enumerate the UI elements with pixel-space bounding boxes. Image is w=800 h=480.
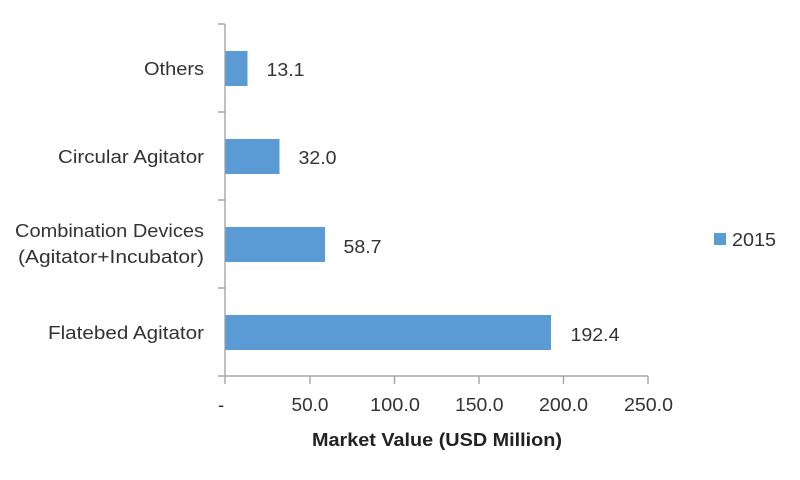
x axis tick labels: 150.0 — [455, 394, 504, 415]
legend: 2015 — [714, 229, 776, 250]
category labels: Flatebed Agitator — [48, 322, 204, 343]
bar: Combination Devices: 58.7 — [344, 236, 382, 257]
y axis with category ticks — [218, 24, 225, 376]
bar: Circular Agitator: 32.0 — [298, 147, 336, 168]
bar: Others: 13.1 — [266, 59, 304, 80]
bar: Combination Devices — [226, 227, 382, 262]
x axis tick labels: 50.0 — [292, 394, 328, 415]
x axis title: Market Value (USD Million) — [312, 430, 562, 450]
category labels: Others — [144, 58, 204, 79]
category labels: Circular Agitator — [58, 146, 204, 167]
bar: Flatebed Agitator — [226, 315, 620, 350]
x axis with value ticks — [218, 376, 648, 384]
bar: Others — [226, 51, 304, 86]
x axis tick labels: 100.0 — [370, 394, 420, 415]
category labels: (Agitator+Incubator) — [18, 246, 204, 267]
category labels: Combination Devices — [15, 220, 204, 241]
x axis tick labels: 200.0 — [539, 394, 588, 415]
legend: 2015: 2015 — [732, 229, 776, 250]
x axis tick labels — [218, 394, 673, 415]
bar: Circular Agitator — [226, 139, 336, 174]
x axis tick labels: - — [218, 394, 224, 415]
bar: Flatebed Agitator: 192.4 — [570, 324, 620, 345]
x axis tick labels: 250.0 — [624, 394, 673, 415]
category labels — [15, 58, 204, 343]
